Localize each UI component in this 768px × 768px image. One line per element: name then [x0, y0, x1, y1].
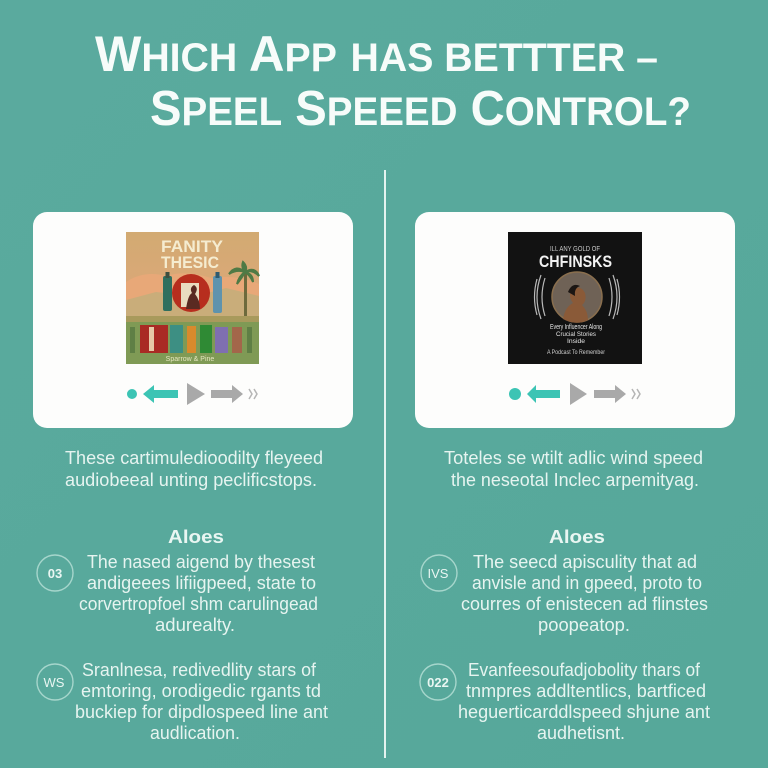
text block: left second item: Sranlnesa, redivedlity stars of	[82, 659, 317, 680]
badge: right first	[421, 555, 457, 591]
text block: right first item: courres of enistecen ad flinstes	[461, 593, 708, 614]
text block: right second item: audhetisnt.	[537, 722, 625, 743]
text block: right description: the neseotal Inclec arpemityag.	[451, 469, 699, 490]
text block: right second item: heguerticarddlspeed shjune ant	[458, 701, 710, 722]
album cover: right: ILL ANY GOLD OF	[550, 246, 600, 253]
text block: right second item	[458, 659, 710, 743]
text block: right second item: tnmpres addltentlics, bartficed	[466, 680, 706, 701]
album cover: right: Inside	[567, 339, 586, 345]
panel: left app card	[33, 212, 353, 428]
badge: left second	[37, 664, 73, 700]
album cover: left: THESIC	[161, 253, 219, 272]
album cover: left	[126, 232, 259, 364]
heading: left column: Aloes	[168, 527, 224, 547]
text block: right second item: Evanfeesoufadjobolity thars of	[468, 659, 701, 680]
audio controls: right	[509, 383, 640, 405]
text block: right description: Toteles se wtilt adlic wind speed	[444, 447, 703, 468]
badge: right second	[420, 664, 456, 700]
title: WHICH APP HAS BETTTER –	[95, 26, 658, 82]
text block: left first item: The nased aigend by thesest	[87, 551, 315, 572]
title: SPEEL SPEEED CONTROL?	[150, 82, 691, 136]
album cover: right: A Podcast To Remember	[547, 350, 605, 356]
album cover: right: Crucial Stories	[556, 332, 596, 338]
text block: right first item: The seecd apisculity that ad	[473, 551, 697, 572]
badge: right first: IVS	[428, 566, 449, 581]
text block: left second item: buckiep for dipdlospeed line ant	[75, 701, 328, 722]
badge: left second: WS	[44, 675, 65, 690]
text block: left first item	[79, 551, 318, 635]
title	[95, 26, 691, 136]
panel: right app card	[415, 212, 735, 428]
text block: left description	[65, 447, 323, 490]
text block: left first item: adurealty.	[155, 614, 235, 635]
text block: left description: audiobeeal unting peclificstops.	[65, 469, 317, 490]
album cover: left: Sparrow & Pine	[166, 356, 214, 363]
badge: left first	[37, 555, 73, 591]
text block: left second item: emtoring, orodigedic rgants td	[81, 680, 321, 701]
text block: right first item: poopeatop.	[538, 614, 630, 635]
badge: right second: 022	[427, 675, 449, 690]
badge: left first: 03	[48, 566, 62, 581]
text block: left first item: andigeees lifiigpeed, state to	[87, 572, 316, 593]
heading: right column: Aloes	[549, 527, 605, 547]
album cover: left: FANITY	[161, 237, 224, 256]
text block: left description: These cartimuledioodilty fleyeed	[65, 447, 323, 468]
album cover: right	[508, 232, 642, 364]
album cover: right: Every Influencer Along	[550, 324, 602, 331]
text block: right first item: anvisle and in gpeed, proto to	[472, 572, 702, 593]
text block: left second item	[75, 659, 328, 743]
center divider	[384, 170, 386, 758]
text block: right description	[444, 447, 703, 490]
text block: left second item: audlication.	[150, 722, 240, 743]
album cover: right: CHFINSKS	[539, 252, 612, 271]
text block: left first item: corvertropfoel shm carulingead	[79, 593, 318, 614]
audio controls: left	[127, 383, 257, 405]
text block: right first item	[461, 551, 708, 635]
